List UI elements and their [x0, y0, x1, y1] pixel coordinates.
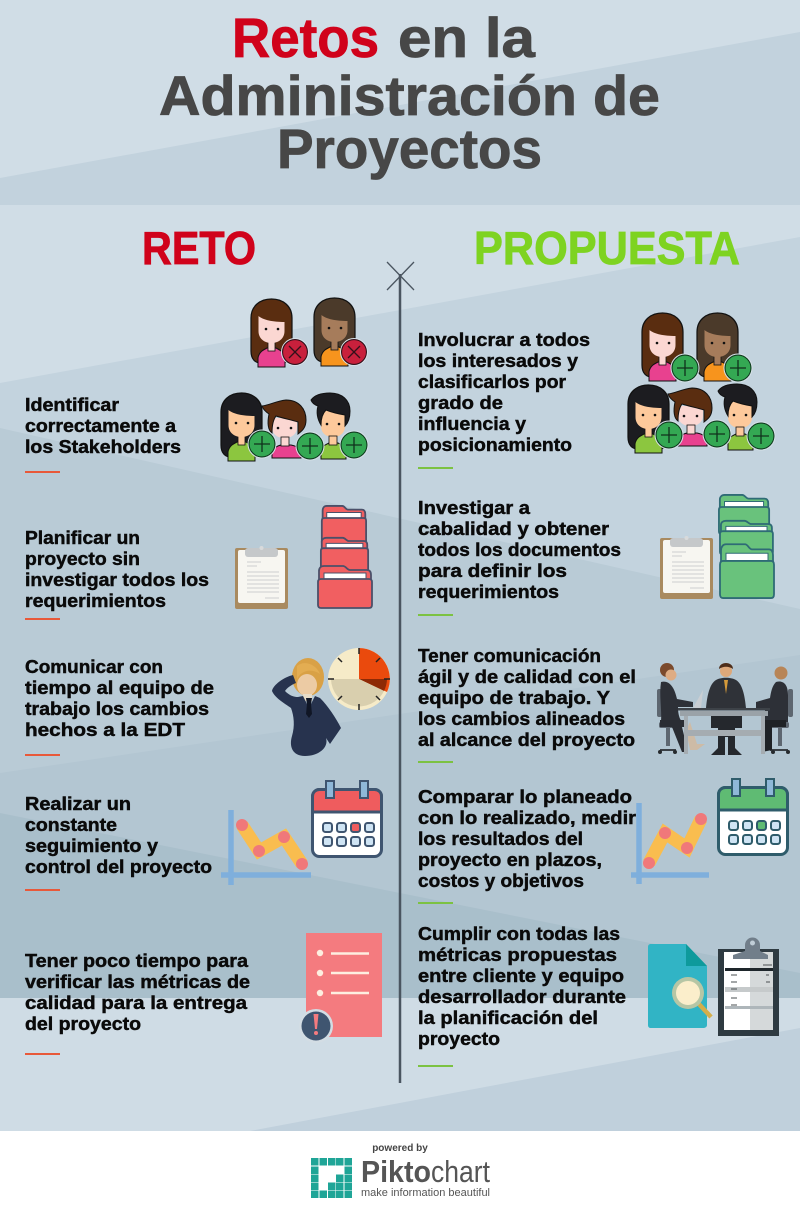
- heading: reto: RETO: [142, 222, 256, 274]
- panel: propuesta 5 text: métricas propuestas: [418, 945, 617, 965]
- panel: reto 5 text: verificar las métricas de: [25, 972, 250, 992]
- title: Retos: [232, 6, 379, 69]
- icon: stressed businesswoman and clock: [272, 648, 390, 756]
- panel: propuesta 5 text: [418, 924, 626, 1067]
- icon: team meeting at a table: [657, 663, 793, 755]
- panel: propuesta 5 text: la planificación del: [418, 1008, 598, 1028]
- title: Proyectos: [277, 117, 542, 180]
- clipboard: [718, 938, 779, 1036]
- chairs: [657, 689, 793, 754]
- panel: propuesta 1 text: [418, 330, 590, 469]
- panel: propuesta 1 text: influencia y: [418, 414, 526, 434]
- icon: all stakeholders included: [628, 313, 775, 453]
- panel: reto 5 text: [25, 951, 250, 1055]
- chart: [221, 810, 311, 885]
- wordmark: make information beautiful: [361, 1187, 490, 1199]
- title: en la: [398, 6, 536, 69]
- panel: propuesta 4 text: costos y objetivos: [418, 871, 584, 891]
- icon: rising chart and green calendar: [631, 779, 788, 884]
- panel: propuesta 5 text: Cumplir con todas las: [418, 924, 620, 944]
- panel: reto 1 stakeholders text: Identificar: [25, 395, 119, 415]
- panel: propuesta 1 text: grado de: [418, 393, 503, 413]
- wordmark: Pikto: [361, 1154, 431, 1189]
- panel: reto 5 text: Tener poco tiempo para: [25, 951, 249, 971]
- powered by: powered by: [372, 1143, 428, 1154]
- panel: reto 2 text: investigar todos los: [25, 570, 209, 590]
- panel: reto 2 text: proyecto sin: [25, 549, 140, 569]
- table: [678, 708, 770, 754]
- logo mark: [311, 1158, 352, 1198]
- panel: propuesta 3 text: [418, 646, 636, 763]
- heading: propuesta: PROPUESTA: [474, 222, 740, 274]
- document: [648, 944, 711, 1028]
- centre person: [706, 663, 746, 755]
- panel: reto 3 text: trabajo los cambios: [25, 699, 209, 719]
- icon: falling chart and red calendar: [221, 781, 382, 885]
- footer: powered by Piktochart: [311, 1143, 490, 1199]
- panel: reto 4 text: control del proyecto: [25, 857, 212, 877]
- panel: reto 5 text: calidad para la entrega: [25, 993, 248, 1013]
- panel: propuesta 2 text: [418, 498, 621, 616]
- calendar: [718, 779, 788, 854]
- panel: propuesta 2 text: Investigar a: [418, 498, 531, 518]
- panel: reto 3 text: tiempo al equipo de: [25, 678, 214, 698]
- panel: propuesta 5 text: proyecto: [418, 1029, 500, 1049]
- panel: propuesta 3 text: al alcance del proyecto: [418, 730, 635, 750]
- panel: reto 2 text: requerimientos: [25, 591, 166, 611]
- panel: reto 4 text: constante: [25, 815, 117, 835]
- panel: propuesta 3 text: ágil y de calidad con el: [418, 667, 636, 687]
- panel: reto 4 text: seguimiento y: [25, 836, 158, 856]
- panel: propuesta 1 text: clasificarlos por: [418, 372, 566, 392]
- panel: propuesta 5 text: desarrollador durante: [418, 987, 626, 1007]
- chart: [631, 803, 709, 884]
- panel: reto 5 text: del proyecto: [25, 1014, 141, 1034]
- title: [159, 6, 660, 180]
- panel: propuesta 5 text: entre cliente y equipo: [418, 966, 624, 986]
- panel: propuesta 4 text: con lo realizado, medir: [418, 808, 636, 828]
- central divider with crossed top: [387, 262, 414, 1083]
- panel: reto 1 stakeholders text: [25, 395, 181, 473]
- panel: propuesta 4 text: Comparar lo planeado: [418, 787, 632, 807]
- panel: reto 2 text: Planificar un: [25, 528, 140, 548]
- panel: propuesta 1 text: Involucrar a todos: [418, 330, 590, 350]
- wordmark: [361, 1154, 490, 1199]
- businesswoman: [272, 658, 341, 756]
- left person: [660, 663, 705, 752]
- panel: reto 3 text: [25, 657, 214, 756]
- panel: propuesta 4 text: [418, 787, 636, 904]
- icon: document with magnifier and clipboard: [648, 938, 779, 1036]
- title: Administración de: [159, 64, 660, 127]
- icon: clipboard and red folders: [235, 506, 372, 609]
- icon: red checklist with alert: [299, 933, 382, 1043]
- panel: propuesta 2 text: para definir los: [418, 561, 567, 581]
- right person: [756, 666, 788, 752]
- panel: reto 1 stakeholders text: correctamente a: [25, 416, 177, 436]
- panel: reto 4 text: [25, 794, 212, 891]
- wordmark: chart: [431, 1154, 490, 1189]
- panel: reto 4 text: Realizar un: [25, 794, 131, 814]
- panel: propuesta 2 text: todos los documentos: [418, 540, 621, 560]
- panel: propuesta 4 text: proyecto en plazos,: [418, 850, 602, 870]
- clock: [328, 648, 390, 710]
- panel: propuesta 2 text: cabalidad y obtener: [418, 519, 609, 539]
- panel: propuesta 1 text: los interesados y: [418, 351, 578, 371]
- panel: reto 2 text: [25, 528, 209, 620]
- panel: reto 3 text: Comunicar con: [25, 657, 163, 677]
- panel: propuesta 4 text: los resultados del: [418, 829, 583, 849]
- panel: reto 1 stakeholders text: los Stakeholders: [25, 437, 181, 457]
- panel: reto 3 text: hechos a la EDT: [25, 720, 185, 740]
- panel: propuesta 1 text: posicionamiento: [418, 435, 572, 455]
- panel: propuesta 3 text: los cambios alineados: [418, 709, 625, 729]
- calendar: [312, 781, 382, 856]
- icon: clipboard and green folders: [660, 495, 774, 599]
- icon: stakeholders excluded and included: [221, 298, 368, 461]
- panel: propuesta 3 text: Tener comunicación: [418, 646, 601, 666]
- panel: propuesta 3 text: equipo de trabajo. Y: [418, 688, 610, 708]
- panel: propuesta 2 text: requerimientos: [418, 582, 559, 602]
